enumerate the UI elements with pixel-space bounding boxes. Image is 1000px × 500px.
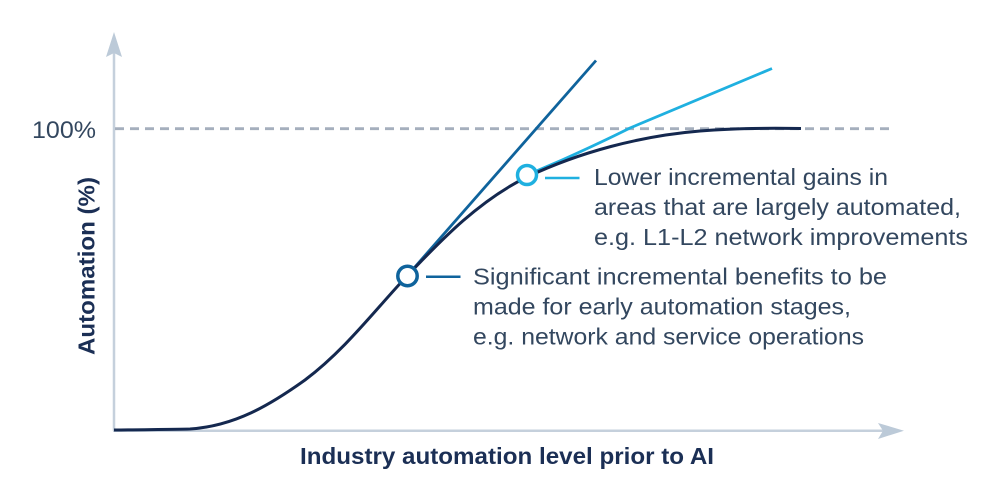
tangent line: early stage bbox=[407, 60, 596, 276]
automation curve bbox=[114, 128, 801, 430]
annotation: significant incremental benefits: Significant incremental benefits to be bbox=[473, 264, 887, 290]
tangent line: late stage bbox=[527, 68, 772, 175]
y axis with arrow bbox=[106, 32, 122, 431]
x axis title: Industry automation level prior to AI bbox=[300, 443, 714, 469]
leader line: late stage bbox=[545, 177, 580, 179]
annotation: significant incremental benefits: e.g. network and service operations bbox=[473, 324, 864, 350]
annotation: significant incremental benefits bbox=[473, 264, 887, 350]
annotation: lower incremental gains: e.g. L1-L2 network improvements bbox=[594, 224, 968, 250]
y tick label: 100%: 100% bbox=[32, 117, 96, 144]
annotation: lower incremental gains bbox=[594, 164, 968, 250]
marker: late stage point bbox=[518, 166, 536, 184]
leader line: early stage bbox=[426, 276, 460, 278]
annotation: lower incremental gains: areas that are largely automated, bbox=[594, 194, 961, 220]
y axis title: Automation (%) bbox=[74, 177, 100, 355]
annotation: lower incremental gains: Lower incremental gains in bbox=[594, 164, 888, 190]
annotation: significant incremental benefits: made for early automation stages, bbox=[473, 294, 851, 320]
marker: early stage point bbox=[398, 266, 417, 286]
x axis with arrow bbox=[113, 423, 904, 439]
100% dashed reference line bbox=[115, 127, 890, 130]
